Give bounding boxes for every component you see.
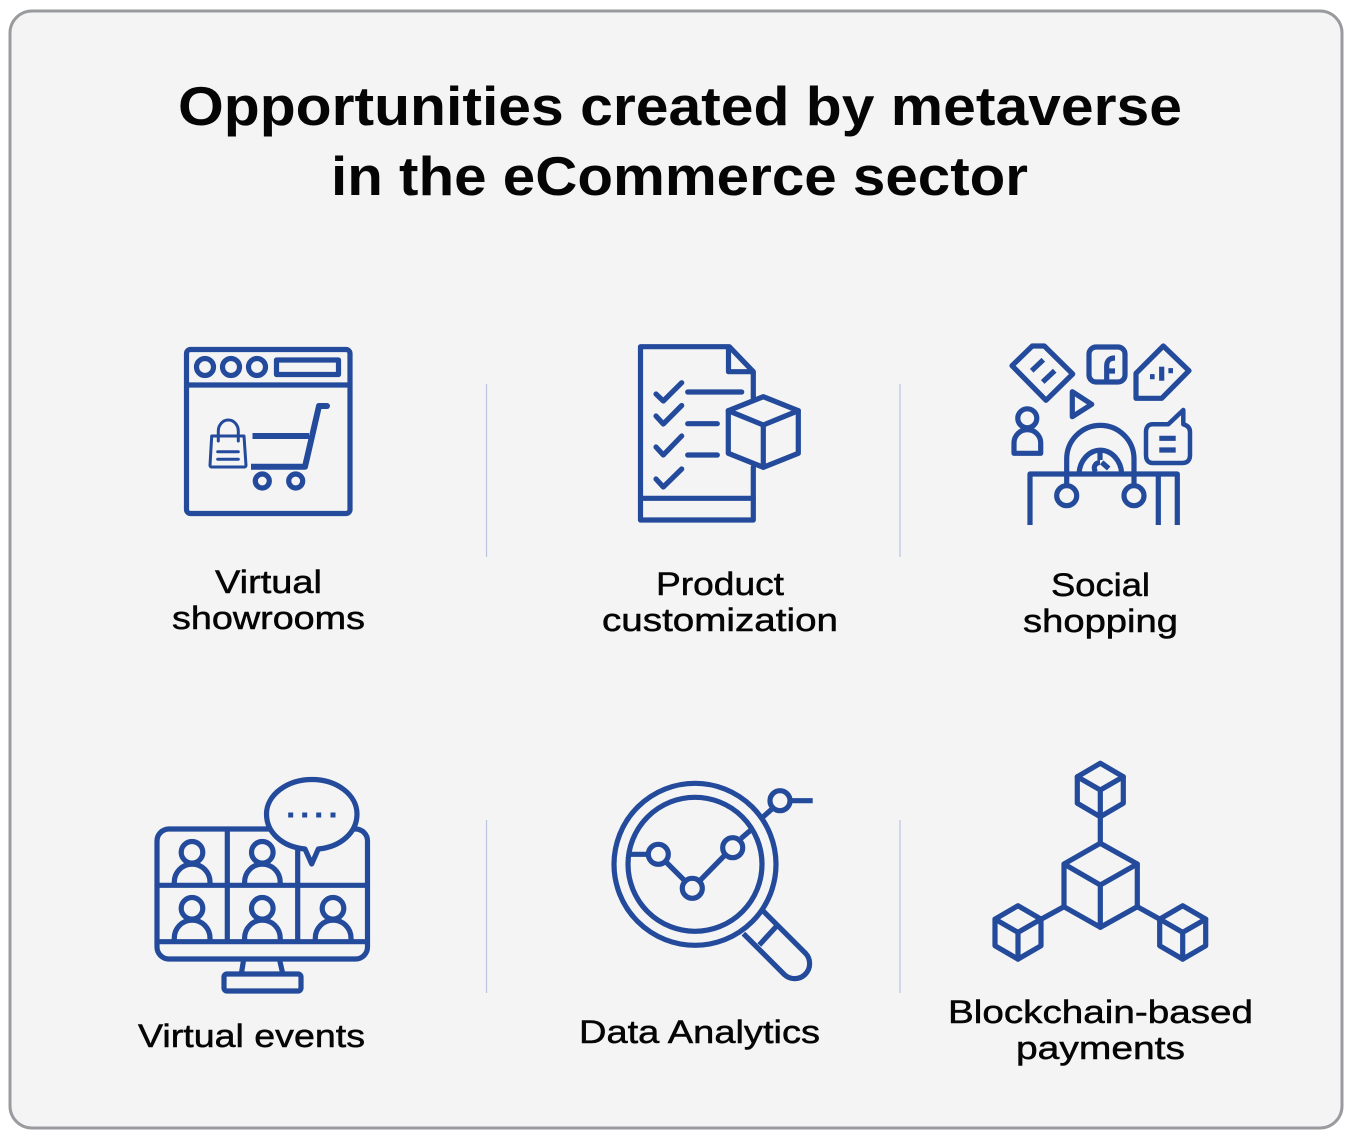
title bbox=[178, 75, 1182, 207]
title: in the eCommerce sector bbox=[331, 145, 1028, 207]
icon: virtual events monitor bbox=[157, 780, 368, 991]
label: virtual showrooms bbox=[172, 564, 365, 636]
title: Opportunities created by metaverse bbox=[178, 75, 1182, 137]
label: product customization bbox=[602, 566, 838, 638]
icon: virtual showrooms browser with cart bbox=[186, 350, 350, 514]
label: virtual events: Virtual events bbox=[138, 1018, 365, 1054]
label: data analytics: Data Analytics bbox=[579, 1014, 820, 1050]
icon: speech bubble dots bbox=[288, 812, 336, 818]
label: virtual showrooms: Virtual bbox=[215, 564, 322, 600]
label: blockchain-based payments bbox=[948, 994, 1253, 1066]
label: virtual showrooms: showrooms bbox=[172, 600, 365, 636]
icon: product customization checklist and box bbox=[640, 347, 798, 520]
icon: social shopping bbox=[1012, 346, 1190, 525]
label: blockchain-based payments: payments bbox=[1016, 1030, 1185, 1066]
label: product customization: Product bbox=[656, 566, 784, 602]
label: blockchain-based payments: Blockchain-based bbox=[948, 994, 1253, 1030]
label: social shopping bbox=[1023, 567, 1178, 639]
icon: blockchain cubes bbox=[995, 763, 1206, 959]
label: social shopping: shopping bbox=[1023, 603, 1178, 639]
label: social shopping: Social bbox=[1051, 567, 1150, 603]
label: product customization: customization bbox=[602, 602, 838, 638]
icon: data analytics magnifier bbox=[614, 783, 813, 979]
